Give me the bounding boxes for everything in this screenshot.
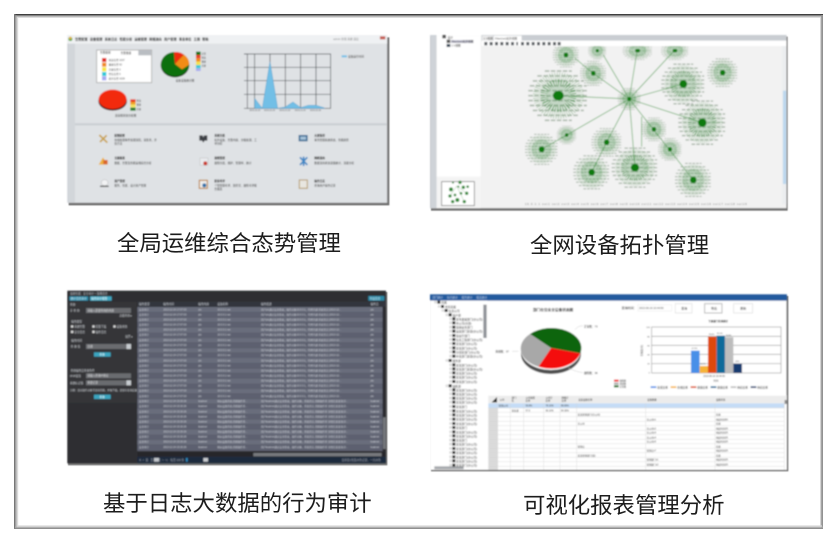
department tree: 某市发展部门(分公司) [456, 317, 483, 321]
panel: log audit screenshot [67, 291, 387, 465]
function shortcuts: 拓扑设备、告警内容、分级处理、工 [214, 138, 257, 142]
title bar [430, 294, 787, 301]
report data table: 响应时间25 [716, 462, 729, 466]
date filter and buttons: 查询时间： [622, 305, 637, 310]
bottom device labels: 10.0.1.1 net1 net2 net3 net4 net5 net6 net7 net8 net9 net10 net11 net12 net13 net14 net15 net16 net17 net18 net19 [525, 203, 747, 206]
bar chart: 响应比率 [757, 385, 768, 389]
pie chart: device status: 正常 [202, 51, 206, 55]
status table: 重要告警 92 [109, 63, 123, 67]
mini map [437, 177, 481, 208]
section divider [75, 123, 387, 125]
tabs and toolbar [482, 35, 787, 46]
area chart: 2013-12-22 [249, 110, 261, 112]
report data table: 市公司 [578, 422, 585, 426]
query panel: 查询 [99, 395, 105, 399]
report data table: 在线 [716, 413, 721, 417]
area chart [244, 54, 364, 112]
graph links [542, 52, 702, 180]
department tree: 某某部门(分公司) [456, 342, 477, 346]
table header: 操作内容 [198, 302, 209, 306]
department tree: 某某部门(分公司) [456, 443, 477, 447]
pagination bar [137, 457, 386, 463]
department tree: 某某部门(分公司) [456, 434, 477, 438]
function shortcuts: 告报表 [214, 187, 223, 191]
bar chart: 40 [647, 354, 651, 356]
function shortcuts: 数据流向状态流量统计、流量分析 [314, 161, 354, 165]
query panel: 安全日志 [74, 330, 85, 334]
department tree: 运营部门某项(分公司) [456, 330, 483, 334]
table header: 公司计 [546, 396, 553, 400]
report data table: 营销点v7 [647, 449, 657, 453]
department tree: 某某部门 [456, 439, 467, 443]
function shortcuts: 在线处理事件处理流程，请您查，并 [114, 138, 157, 142]
bar chart: 健康比率 [717, 385, 728, 389]
dashboard window [67, 35, 387, 203]
date filter and buttons: 查询 [681, 306, 687, 311]
bar chart [639, 319, 781, 389]
pie chart: device status [161, 51, 207, 82]
device tree: 1 V视图 [451, 44, 461, 48]
department tree: 某某部门(分公司) [456, 409, 477, 413]
department tree: 某某部门 [456, 405, 467, 409]
department tree: 市公司(分部) [456, 321, 472, 325]
query panel: IP/IP段等 [70, 374, 81, 378]
query panel: 查询 [70, 303, 76, 307]
bar chart: 0 [649, 373, 651, 375]
table header: 公司 [500, 397, 505, 401]
topology graph [525, 42, 738, 196]
device tree [437, 35, 481, 177]
department tree: 某某部门(分公司) [456, 455, 477, 459]
table header: 安装设备名称 [578, 397, 593, 401]
query panel: 查询 [99, 353, 105, 357]
bar chart: 78.6% [709, 334, 715, 336]
status table: 告警数量 [121, 51, 132, 55]
department tree: 某某部门(分公司) [456, 418, 477, 422]
caption: global operations: 全局运维综合态势管理 [117, 231, 341, 256]
query panel: 查询操作员查询条件 [71, 368, 95, 372]
table header: 设备状态 [716, 397, 726, 401]
pie chart: department status: 离线数：37 [495, 349, 509, 353]
table header: 部门 [512, 396, 517, 400]
department tree: 某某部门(分公司) [456, 392, 477, 396]
table header: 设备名称 [217, 302, 228, 306]
bar chart: 2013-06-16 10:44:50 [703, 376, 726, 378]
department tree: 某某部门(分公司) [456, 376, 477, 380]
window shadow [431, 296, 788, 471]
report data table: 66.10% [546, 410, 554, 412]
department tree: 信息公司 [449, 309, 460, 313]
bar chart: 下属部门在线统计 [708, 319, 729, 323]
report data table: 78.10% [546, 406, 554, 408]
department tree: 某某部门(分公司) [456, 413, 477, 417]
report data table: 在线 [716, 422, 721, 426]
pie chart: department status: 离线数 [620, 382, 627, 386]
query panel: 配置下发 [96, 325, 107, 329]
pie chart: alarm status: 连接端状态分析图 [115, 114, 137, 118]
table scroll bars [137, 307, 386, 457]
department tree: 某某部门(分公司) [456, 371, 477, 375]
table header: 操作时间 [163, 302, 174, 306]
report data table: 响应时间25 [716, 449, 729, 453]
date filter and buttons: 刷新 [740, 306, 746, 311]
query panel [68, 302, 138, 403]
function shortcuts: 故障分类、维护、管理单、统计 [214, 161, 252, 165]
function shortcuts [99, 133, 354, 191]
device tree: 设计 [448, 35, 453, 39]
department tree: 某某部门(分公司) [456, 459, 477, 463]
bar chart: 60 [647, 345, 651, 347]
table header: 操作员 [371, 302, 379, 306]
department tree: 客户部 [453, 313, 461, 317]
function shortcuts: 网络流向 [314, 156, 325, 160]
status table: 警告告警 5 [109, 72, 121, 76]
report data table: 响应时间25 [716, 426, 729, 430]
bar chart: 47.9% [692, 348, 698, 350]
department tree: 某某部门(分公司) [456, 363, 477, 367]
bar chart: 20 [647, 364, 651, 366]
department tree: 某某部门某项(分公司) [456, 367, 483, 371]
query panel: 子 查 询 [70, 308, 80, 312]
query panel: 请输入需要查询的内容 [87, 308, 114, 312]
device clusters [525, 42, 738, 196]
top tabs: 导出日志 [370, 297, 381, 301]
department tree [430, 301, 487, 470]
report data table: 营业部 [512, 408, 519, 412]
date filter and buttons: 导出 [711, 306, 717, 311]
pagination bar: 显示第1到第25条记录，一共25条 [342, 458, 381, 462]
area chart: 2013-12-25 [295, 110, 306, 112]
area chart: 2013-12-23 [264, 110, 276, 112]
table rows [137, 307, 383, 451]
window shadow [69, 37, 389, 205]
function shortcuts: 数据、告警及性能运维综合分析 [114, 161, 152, 165]
report data table: 营销部门v1 [647, 458, 659, 462]
pie chart: department status [495, 324, 627, 388]
audit log table [137, 302, 386, 463]
pagination bar: K < 第 页 共2页 > >| 每页 100 条 [139, 458, 185, 462]
department tree: 某某部门(分公司) [456, 464, 477, 468]
department tree: 某某部门(分公司) [456, 401, 477, 405]
audit window [67, 291, 386, 463]
caption: network topology: 全网设备拓扑管理 [530, 233, 709, 258]
pie chart: device status: 次要 [202, 63, 207, 67]
report data table: 营销公司 [499, 404, 509, 408]
department tree: 某某部门(分公司) [456, 397, 477, 401]
menu bar [67, 35, 387, 44]
window shadow [68, 292, 387, 465]
department tree: 销售部 [453, 384, 461, 388]
bar chart: 14.2% [700, 363, 706, 365]
query panel: 高级查询 ▸ [119, 314, 133, 318]
pie chart: alarm status [98, 90, 142, 118]
report data table: 在线 [716, 453, 721, 457]
report data table: 市公司v2 [647, 426, 657, 430]
table header: 设备数量 [647, 397, 657, 401]
report data table: 市公司v1 [647, 417, 657, 421]
report window [430, 294, 787, 470]
report data table: 89.83% [561, 406, 569, 408]
report data table: 营销点 [578, 444, 585, 448]
function shortcuts: 处方法 [114, 141, 123, 145]
function shortcuts: 主题报表 [114, 156, 125, 160]
date filter and buttons [622, 304, 753, 313]
bar chart: 80 [647, 336, 651, 338]
scroll bar [782, 46, 787, 204]
department tree: 中某部门某项(分公司) [456, 355, 483, 359]
query panel: 操作时间 [71, 338, 82, 342]
department tree: 营销业务部门 [456, 326, 473, 330]
department tree: 某某部门(分公司) [456, 430, 477, 434]
function shortcuts: 单分配 [214, 141, 223, 145]
report data table: 响应时间50 [716, 417, 729, 421]
pie chart: alarm status: 次要 [137, 107, 142, 111]
bar chart: 100 [646, 327, 651, 329]
report data table: 某某营销部门(营) [578, 453, 596, 457]
area chart: 2013-12-26 [310, 110, 322, 112]
department tree: 营业厅部门 [456, 334, 470, 338]
report data table: 市公司v4 [647, 435, 657, 439]
query panel: 请输入查询IP地址 [87, 374, 109, 378]
bar chart: 20% [735, 361, 740, 363]
bar chart: 在线百分比 [639, 344, 643, 356]
side rail [67, 44, 75, 203]
top tabs: 统计日志审计 [71, 297, 87, 301]
department tree: 某某部门(分公司) [456, 451, 477, 455]
department tree: 某某部门(分公司) [456, 388, 477, 392]
query panel: 设备状态 [117, 325, 128, 329]
report data table: 营销部门v2 [647, 462, 659, 466]
pie chart: department status: 故障数 [620, 379, 627, 383]
device tree: Fiber(net)拓扑视图 [451, 40, 474, 44]
bar chart: 76.8% [726, 335, 731, 337]
function shortcuts: 服务、位置、设计资产管理 [114, 184, 147, 188]
function shortcuts: 大屏监控 [314, 133, 325, 137]
report data table: 84.30% [561, 410, 569, 412]
department tree: 分部某部门(分公司) [456, 350, 480, 354]
department tree: 信息工程部门(分公司) [456, 338, 483, 342]
table header: 操作类型 [139, 302, 150, 306]
panel: network topology screenshot [430, 35, 788, 211]
pie chart: alarm status: 重要 [137, 102, 142, 106]
pie chart: department status: 正常数 [620, 384, 627, 388]
table header: 比率 [546, 398, 551, 402]
tabs and toolbar: Fiber(net)拓扑视图 [495, 36, 517, 40]
report data table: 响应时间25 [716, 458, 729, 462]
query panel: 日期 [87, 344, 93, 348]
report data table: 响应时间25 [716, 431, 729, 435]
top tabs [69, 292, 384, 301]
function shortcuts: 事务管理系统状态、性能趋势 [314, 138, 349, 142]
topology window [430, 35, 787, 208]
title bar: 部门统计 执行统计 报告统计 报表统计 [432, 295, 487, 299]
bar chart: 接受比率 [657, 385, 668, 389]
bar chart: 在线比率 [677, 385, 688, 389]
department tree: 某某部门 [456, 426, 467, 430]
department tree: 某某部门(分公司) [456, 447, 477, 451]
query panel: 操作日志 [96, 330, 107, 334]
report data table: 在线 [716, 444, 721, 448]
report data table [488, 395, 787, 470]
caption: behaviour audit: 基于日志大数据的行为审计 [103, 491, 372, 516]
panel: visual report screenshot [430, 294, 788, 471]
table header: 公司接受 [526, 396, 536, 400]
pie chart heading: 部门在位安全设备状态图 [533, 307, 574, 312]
pie chart: department status: 正常数：73 [584, 324, 598, 328]
menu bar: 告警配置 设备管理 系统日志 性能分析 运维管理 网络流向 用户管理 事业单位 主题 帮助 [75, 36, 209, 41]
pie chart: department status: 故障数：36 [584, 371, 598, 375]
table header: 操作描述 [261, 302, 272, 306]
status table [97, 50, 152, 83]
table header [137, 302, 386, 307]
status table: 紧急告警 1037 [109, 58, 125, 62]
report data table: 市公司v5 [647, 440, 657, 444]
status table: 提示告警 1029 [109, 76, 125, 80]
query panel: 系统标记值 [70, 381, 84, 385]
panel: global operations dashboard screenshot [67, 35, 389, 205]
function shortcuts: 资产管理 [114, 179, 125, 183]
function shortcuts: 操作日志 [314, 179, 325, 183]
status table: 次要告警 3 [109, 67, 121, 71]
bar chart: 时间 [714, 378, 719, 382]
bar chart: 响应比率 [737, 385, 748, 389]
tool rail [430, 35, 437, 208]
tabs and toolbar: 1 V视图 [484, 36, 493, 40]
query panel: 查 询 值 [71, 344, 80, 348]
date filter and buttons: 2013-06-16 10:44:50 [639, 306, 664, 310]
bar chart: 健康比率 [697, 385, 708, 389]
function shortcuts: 个管管理考评、监控室、故障考评报 [214, 184, 257, 188]
report data table: 某某营销部门(分公司) [578, 413, 600, 417]
department tree: 某某部门(分公司) [456, 346, 477, 350]
function shortcuts: 系统分类 [214, 133, 225, 137]
query panel: 重要记录 [87, 381, 98, 385]
top tabs: 操作审计报警 [91, 297, 108, 301]
pie chart: alarm status: 紧急 [137, 99, 142, 103]
report data table: 市公司v3 [647, 431, 657, 435]
query panel: 展开 ▸ [125, 334, 133, 338]
table header: 名 [512, 398, 514, 402]
pie chart: device status: 重要 [202, 59, 207, 63]
function shortcuts: 配置配置 [114, 133, 125, 137]
report data table: 响应时间25 [716, 435, 729, 439]
report data table: 56.8% [526, 406, 532, 408]
function shortcuts: 职业考评 [214, 179, 225, 183]
pie chart: device status: 设备设备统计图 [176, 78, 195, 82]
table header: 比率 [526, 398, 531, 402]
caption: report analysis: 可视化报表管理分析 [523, 493, 725, 518]
top tabs: 当前位置：安全审计 > 策略日志 [70, 292, 108, 296]
department tree: 市局直属 [445, 305, 456, 309]
window shadow [431, 37, 788, 211]
report data table: 响应时间25 [716, 440, 729, 444]
query panel: 注释：请对操作对象可查询日期，并做下载，请保存查询结果 [70, 388, 138, 392]
department tree: 某某部门(分公司) [456, 422, 477, 426]
table header: 网络计 [562, 396, 569, 400]
menu bar: admin 在线 系统 退出 [333, 37, 359, 41]
status table: 告警级别 [100, 51, 111, 55]
table header [488, 396, 787, 403]
query panel: 系统告警 [74, 325, 85, 329]
area chart: 设备运行时间 [348, 54, 364, 58]
department tree: 某某部门(分公司) [456, 380, 477, 384]
area chart: 2013-12-24 [279, 110, 291, 112]
department tree: 服务部 [453, 359, 461, 363]
function shortcuts: 故障管理 [214, 156, 225, 160]
function shortcuts: 查询用户操作记录 [314, 184, 336, 188]
bar chart: 81.0% [717, 333, 723, 335]
query panel: 操作类型 [71, 319, 82, 323]
table header: 比率 [562, 398, 567, 402]
pie chart: device status: 紧急 [202, 55, 207, 59]
department tree: 局属 [441, 301, 447, 305]
report data table: 57.0 [526, 410, 531, 412]
